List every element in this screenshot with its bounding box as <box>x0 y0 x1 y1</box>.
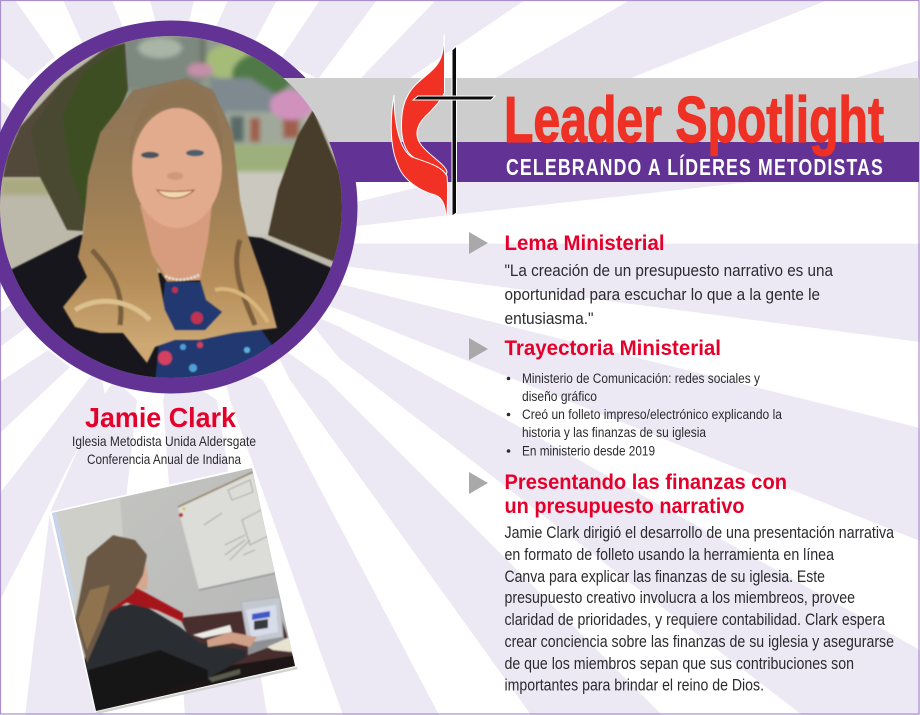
quote text: entusiasma." <box>504 309 594 328</box>
bullet list: Ministerio de Comunicación: redes sociales y <box>522 371 760 386</box>
hair <box>75 535 147 663</box>
eyes <box>141 152 159 158</box>
section: Presentando las finanzas <box>469 471 894 694</box>
arrow icon <box>469 232 488 254</box>
hands <box>207 632 257 647</box>
conference: Conferencia Anual de Indiana <box>87 451 241 467</box>
office photo frame <box>49 466 296 712</box>
smile <box>157 190 194 198</box>
face <box>135 560 148 590</box>
flowers <box>158 351 172 365</box>
name caption <box>72 402 256 467</box>
bullet list: historia y las finanzas de su iglesia <box>522 425 706 440</box>
under desk shadow <box>96 655 296 712</box>
chair <box>208 669 240 682</box>
scarf <box>107 588 183 622</box>
jacket <box>12 234 88 338</box>
paragraph: importantes para brindar el reino de Dios. <box>504 676 764 694</box>
paragraph: presupuesto creativo involucra a los miembreos, provee <box>504 588 855 607</box>
paper <box>267 637 293 652</box>
bullet list <box>507 371 782 458</box>
laptop screen <box>241 597 283 643</box>
paragraph: en formato de folleto usando la herramienta en línea <box>504 545 834 564</box>
paragraph: de que los miembros sepan que sus contribuciones son <box>504 654 854 673</box>
gray banner <box>270 78 919 142</box>
paragraph <box>504 523 894 694</box>
cross horizontal <box>413 96 495 100</box>
heading <box>504 471 787 518</box>
flame lower tongue <box>391 95 448 225</box>
necklace <box>165 275 199 280</box>
section: Trayectoria Ministerial <box>469 337 782 458</box>
heading: Trayectoria Ministerial <box>504 337 721 360</box>
quote text <box>504 261 833 328</box>
lower sweater shadow <box>88 650 208 712</box>
hair parting <box>130 82 223 170</box>
name: Jamie Clark <box>85 402 236 433</box>
heading: Presentando las finanzas con <box>504 471 787 494</box>
bullet list: Creó un folleto impreso/electrónico explicando la <box>522 407 782 422</box>
nose shadow <box>167 172 183 180</box>
blue blouse <box>155 282 272 385</box>
arrow icon <box>469 338 488 360</box>
neck and chest <box>140 205 212 280</box>
office photo: Jamie at laptop <box>52 468 295 711</box>
purple banner <box>270 142 919 182</box>
heading: un presupuesto narrativo <box>504 495 744 518</box>
arrow icon <box>469 472 488 494</box>
portrait photo: Jamie Clark <box>0 30 345 390</box>
bullet list: En ministerio desde 2019 <box>522 444 655 458</box>
keyboard <box>248 637 288 655</box>
hair wave shadows <box>92 250 121 325</box>
desk <box>181 610 293 666</box>
cross vertical <box>452 46 456 216</box>
quote text: oportunidad para escuchar lo que a la gente le <box>504 285 820 304</box>
flame upper tongue <box>402 35 447 176</box>
church: Iglesia Metodista Unida Aldersgate <box>72 433 256 449</box>
paragraph: Canva para explicar las finanzas de su iglesia. Este <box>504 567 825 586</box>
hair <box>63 78 277 363</box>
face <box>132 108 222 228</box>
bullet list: diseño gráfico <box>522 389 597 404</box>
office photo shadow <box>95 666 298 714</box>
purple ring <box>0 20 358 394</box>
quote text: "La creación de un presupuesto narrativo es una <box>504 261 833 280</box>
section: Lema Ministerial <box>469 232 833 328</box>
sweater <box>83 603 247 712</box>
heading: Lema Ministerial <box>504 232 664 255</box>
notebook <box>193 625 232 638</box>
right tree trunk <box>268 110 345 265</box>
whiteboard <box>178 473 276 590</box>
left tree trunk <box>29 42 129 232</box>
logo: cross and flame <box>391 35 495 225</box>
